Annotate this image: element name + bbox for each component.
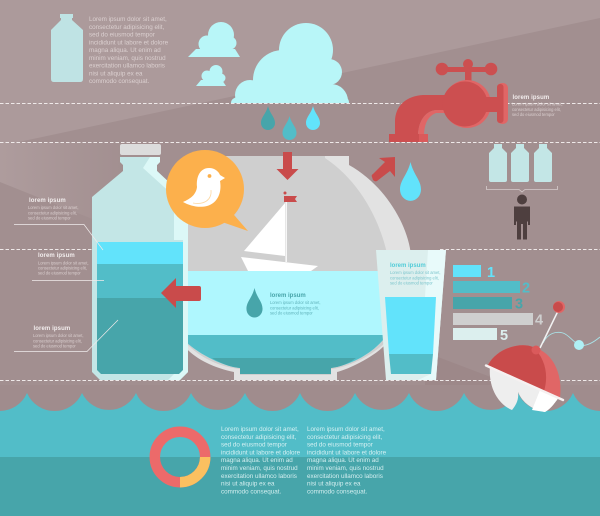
top text block: consectetur adipisicing elit, [89,24,165,31]
bottom text column 2: commodo consequat. [307,488,367,495]
bar chart: 5 [500,328,508,344]
label 1: Lorem ipsum dolor sit amet, [28,205,79,210]
glass [376,250,446,380]
top text block: exercitation ullamco laboris [89,63,165,70]
label 3: lorem ipsum [34,326,70,332]
bottom text column 2: consectetur adipisicing elit, [307,434,383,441]
donut chart [155,432,205,482]
icon: drop in bowl [246,288,263,318]
glass water [385,297,436,354]
faucet caption [512,95,564,117]
icon: mid drop [282,116,296,140]
bird speech bubble [166,150,248,231]
bottom text column 1: sed do eiusmod tempor [221,442,287,449]
bar chart [453,265,543,344]
bowl caption: sed do eiusmod tempor [270,310,313,316]
label 2: lorem ipsum [38,253,75,259]
glass caption: lorem ipsum [390,263,426,269]
icon: top bottle [51,14,83,82]
icon: dark drop [261,106,275,130]
label 3 [14,320,118,352]
buoy line [543,332,600,350]
bar chart: 1 [487,265,495,281]
label 2 [32,253,104,280]
bottom text column 1: minim veniam, quis nostrud [221,465,298,472]
faucet caption: sed do eiusmod tempor [512,112,555,117]
red arrow up right [372,157,395,181]
bottom text column 1: consectetur adipisicing elit, [221,434,297,441]
label 1: sed do eiusmod tempor [28,216,71,220]
top text block: incididunt ut labore et dolore [89,40,169,46]
top text block: nisi ut aliquip ex ea [89,70,143,78]
icon: three bottles [489,144,552,182]
label 3: sed do eiusmod tempor [33,344,76,348]
bowl caption: lorem ipsum [270,293,306,299]
faucet caption: consectetur adipisicing elit, [512,107,561,112]
icon: smallest cloud [196,65,226,86]
top text block: Lorem ipsum dolor sit amet, [89,16,167,23]
icon: sail boat [241,192,318,271]
bottle cap [120,144,161,155]
label 1 [14,198,103,250]
icon: drop by bowl [400,162,421,201]
label 3: consectetur adipisicing elit, [33,338,82,344]
dashed guide lines [0,104,600,380]
bowl water [186,271,390,374]
bottom text column 1: exercitation ullamco laboris [221,473,297,480]
bracket [486,186,558,192]
fish bowl [186,156,411,380]
bowl caption [270,293,322,316]
bottom text column 2: nisi ut aliquip ex ea [307,481,361,488]
glass caption [390,263,442,286]
icon: bird [183,168,225,207]
bottom text column 1: commodo consequat. [221,488,281,495]
bar chart: 3 [515,296,523,312]
label 1: lorem ipsum [29,198,66,204]
top text block: minim veniam, quis nostrud [89,55,166,62]
bottom text column 2: incididunt ut labore et dolore [307,449,387,456]
bowl water mid layer [186,335,390,374]
glass water lower [389,354,433,374]
bottle water: mid [97,264,183,298]
label 1: consectetur adipisicing elit, [28,210,77,216]
bottle water: light [97,242,183,264]
label 3: Lorem ipsum dolor sit amet, [33,333,84,338]
faucet caption: Lorem ipsum dolor sit amet, [512,102,563,106]
icon: person [514,194,530,240]
bottom text column 1: magna aliqua. Ut enim ad [221,457,293,464]
bar chart: 4 [535,312,543,328]
faucet caption: lorem ipsum [512,95,549,101]
bottom text column 2: Lorem ipsum dolor sit amet, [307,426,385,433]
bottom text column 2: magna aliqua. Ut enim ad [307,457,379,464]
icon: light drop [306,106,320,130]
label 2: sed do eiusmod tempor [38,270,81,276]
top text block: sed do eiusmod tempor [89,32,155,39]
bottom text column 2: minim veniam, quis nostrud [307,465,384,472]
icon: faucet [389,59,508,142]
bar chart: 2 [522,280,530,296]
bottom text column 1: nisi ut aliquip ex ea [221,481,275,488]
glass caption: consectetur adipisicing elit, [390,276,439,280]
bottle water: dark [97,298,183,374]
red arrow down [276,152,298,180]
icon: big cloud [231,23,349,103]
glass caption: Lorem ipsum dolor sit amet, [390,270,441,275]
top text block: magna aliqua. Ut enim ad [89,47,161,54]
bottom text column 2: sed do eiusmod tempor [307,442,373,449]
glass caption: sed do eiusmod tempor [390,280,433,286]
sea waves [0,385,600,516]
bottom text column 1: Lorem ipsum dolor sit amet, [221,426,299,433]
icon: small cloud [188,22,240,57]
bowl caption: consectetur adipisicing elit, [270,306,319,310]
bowl caption: Lorem ipsum dolor sit amet, [270,300,321,305]
top text block: commodo consequat. [89,78,149,85]
icon: buoy [486,301,565,412]
red arrow left [161,278,201,308]
label 2: consectetur adipisicing elit, [38,266,87,270]
bottom text column 2: exercitation ullamco laboris [307,473,383,480]
bottom text column 1: incididunt ut labore et dolore [221,449,301,456]
bowl water dark layer [212,358,356,374]
label 2: Lorem ipsum dolor sit amet, [38,260,89,266]
large bottle [92,144,188,380]
